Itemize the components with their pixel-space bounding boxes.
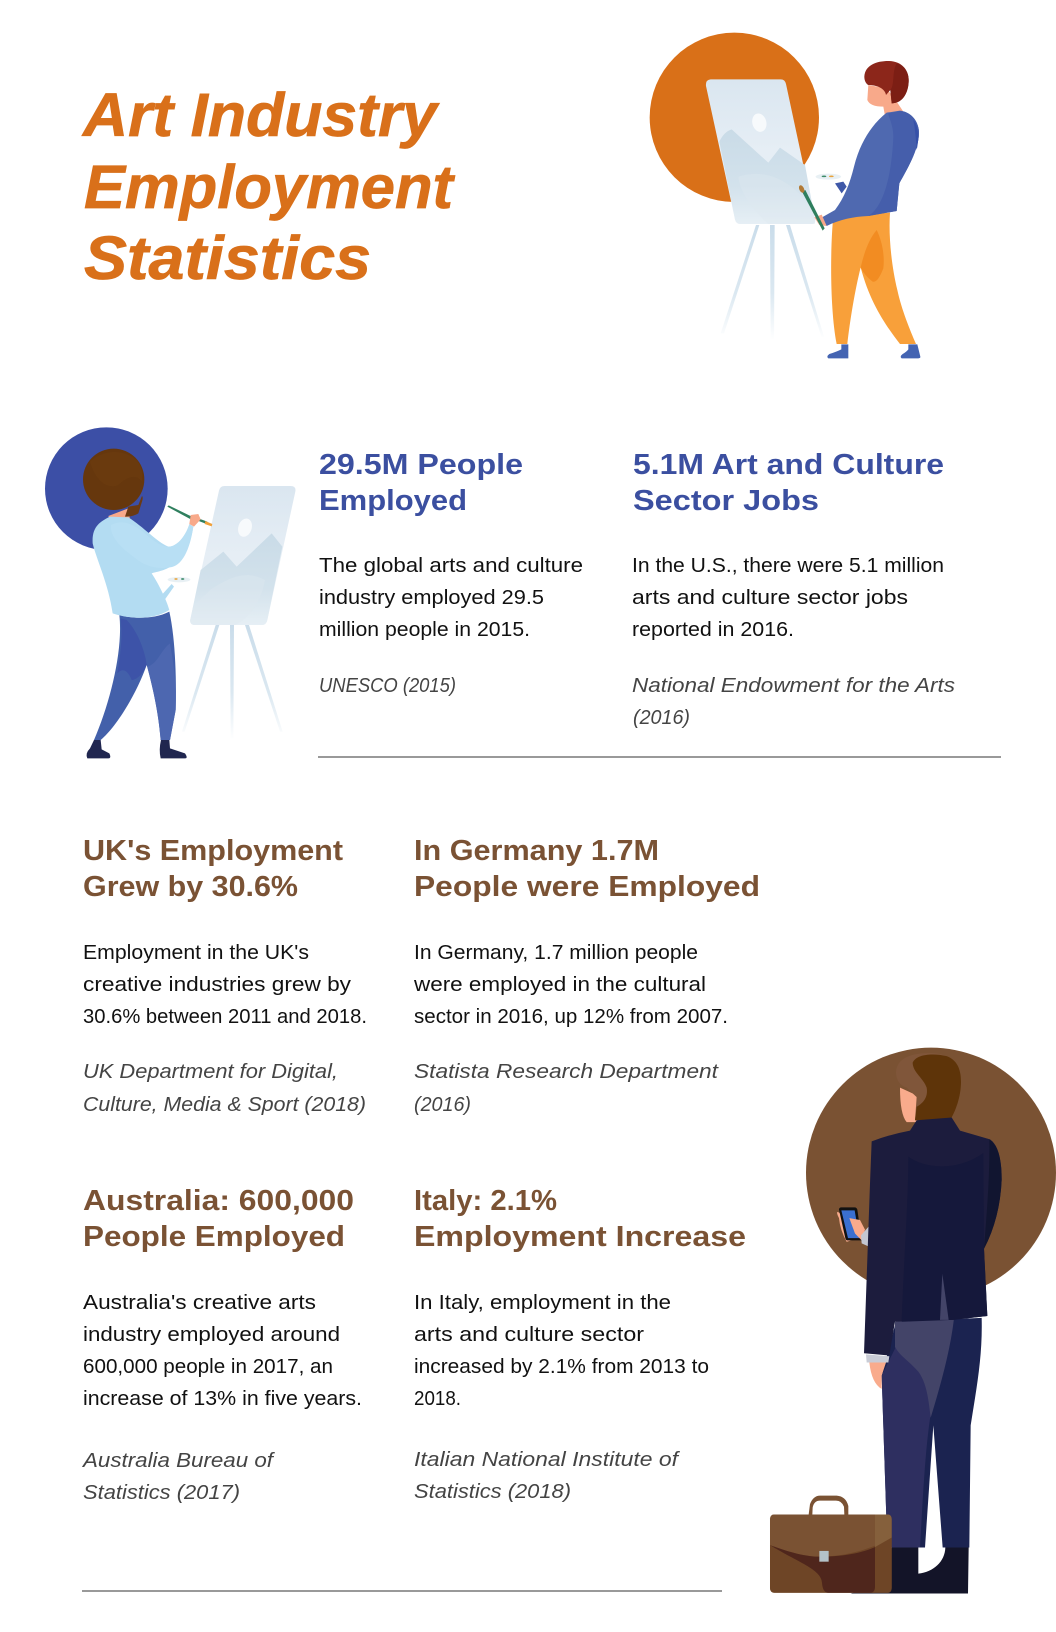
body text: Australia's creative arts: [83, 1291, 316, 1314]
source: UK Department for Digital,: [83, 1060, 338, 1083]
panel: Italy employment: [414, 1185, 746, 1503]
body text: 600,000 people in 2017, an: [83, 1355, 333, 1378]
panel: 5.1M art and culture jobs: [632, 449, 955, 729]
illustration: painter in blue sweater with orange circle: [650, 33, 920, 358]
panel: UK employment: [83, 835, 367, 1116]
heading: [414, 1185, 746, 1253]
panel: 29.5M people employed: [319, 449, 583, 697]
heading: In Germany 1.7M: [414, 835, 659, 867]
panel: Germany employment: [413, 835, 760, 1116]
heading: Employment Increase: [414, 1221, 746, 1253]
body text: The global arts and culture: [319, 554, 583, 577]
heading: People were Employed: [414, 871, 760, 903]
body text: [83, 1291, 362, 1410]
body text: [83, 941, 367, 1028]
source: Italian National Institute of: [414, 1448, 681, 1471]
body text: arts and culture sector jobs: [632, 586, 908, 609]
body text: Employment in the UK's: [83, 941, 309, 964]
body text: million people in 2015.: [319, 618, 530, 641]
source: National Endowment for the Arts: [632, 674, 955, 697]
title: Employment: [84, 153, 456, 221]
source: Statista Research Department: [414, 1060, 719, 1083]
heading: Grew by 30.6%: [83, 871, 298, 903]
title: [81, 81, 456, 292]
body text: were employed in the cultural: [413, 973, 706, 996]
body text: [632, 554, 944, 641]
source: Statistics (2017): [83, 1481, 240, 1504]
body text: [319, 554, 583, 641]
source: Statistics (2018): [414, 1480, 571, 1503]
heading: [633, 449, 944, 517]
source: Australia Bureau of: [81, 1449, 276, 1472]
body text: industry employed around: [83, 1323, 340, 1346]
body text: [413, 941, 728, 1028]
source: UNESCO (2015): [319, 674, 456, 697]
body text: 2018.: [414, 1387, 461, 1410]
heading: [83, 1185, 354, 1253]
source: [414, 1448, 681, 1503]
source: Culture, Media & Sport (2018): [83, 1093, 366, 1116]
source: [83, 1060, 366, 1116]
body text: sector in 2016, up 12% from 2007.: [414, 1005, 728, 1028]
body text: In the U.S., there were 5.1 million: [632, 554, 944, 577]
body text: [414, 1291, 709, 1410]
body text: reported in 2016.: [632, 618, 794, 641]
title: Statistics: [84, 224, 371, 292]
heading: [414, 835, 760, 903]
body text: In Germany, 1.7 million people: [414, 941, 698, 964]
heading: Italy: 2.1%: [414, 1185, 557, 1217]
body text: increased by 2.1% from 2013 to: [414, 1355, 709, 1378]
source: (2016): [633, 706, 690, 729]
body text: creative industries grew by: [83, 973, 352, 996]
body text: increase of 13% in five years.: [83, 1387, 362, 1410]
heading: [83, 835, 343, 903]
illustration: painter in light blue sweater with blue circle: [45, 427, 295, 758]
heading: Australia: 600,000: [83, 1185, 354, 1217]
heading: UK's Employment: [83, 835, 343, 867]
heading: Sector Jobs: [633, 485, 819, 517]
source: [414, 1060, 719, 1116]
heading: People Employed: [83, 1221, 345, 1253]
title: Art Industry: [81, 81, 440, 149]
illustration: businessman with phone, briefcase and brown circle: [770, 1048, 1056, 1594]
heading: 29.5M People: [319, 449, 523, 481]
body text: In Italy, employment in the: [414, 1291, 671, 1314]
body text: arts and culture sector: [414, 1323, 644, 1346]
heading: Employed: [319, 485, 467, 517]
heading: [319, 449, 523, 517]
body text: industry employed 29.5: [319, 586, 544, 609]
source: (2016): [414, 1093, 471, 1116]
source: [632, 674, 955, 729]
source: [81, 1449, 276, 1504]
body text: 30.6% between 2011 and 2018.: [83, 1005, 367, 1028]
panel: Australia employment: [81, 1185, 362, 1504]
heading: 5.1M Art and Culture: [633, 449, 944, 481]
